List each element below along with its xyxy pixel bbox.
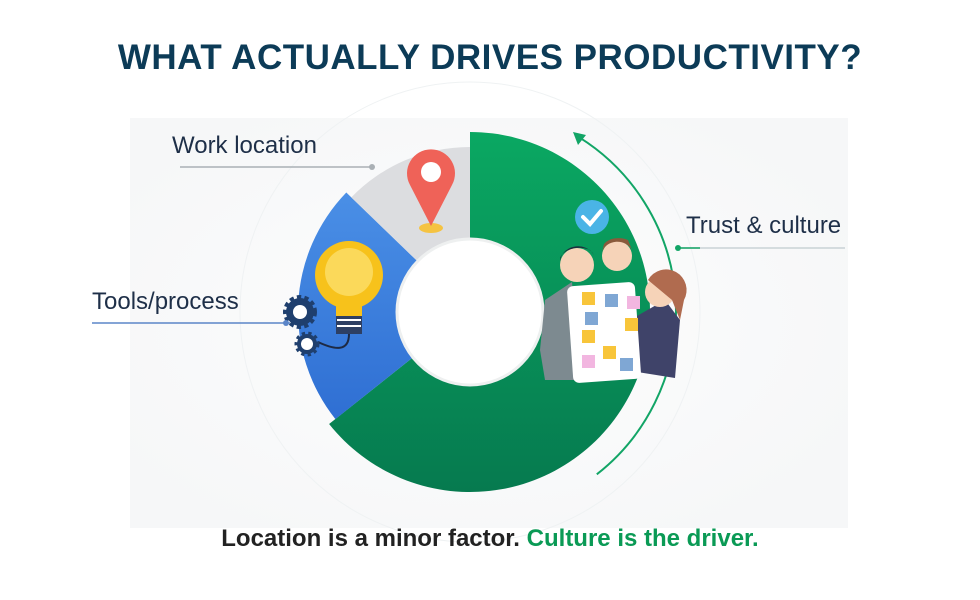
segment: tools/process: [298, 192, 418, 419]
label line: trust & culture: [675, 245, 845, 251]
illustration: team with board: [540, 238, 687, 383]
title: WHAT ACTUALLY DRIVES PRODUCTIVITY?: [118, 38, 862, 77]
arrow: growth arc: [573, 132, 676, 474]
label: trust & culture: Trust & culture: [686, 212, 841, 239]
icon: checkmark badge: [575, 200, 609, 234]
donut chart: [298, 132, 650, 492]
segment: trust & culture: [329, 132, 650, 492]
icon: location pin: [407, 149, 455, 233]
icon: light bulb and gears: [286, 241, 383, 354]
label line: work location: [180, 164, 375, 170]
bottom caption: Location is a minor factor. Culture is the driver.: [221, 525, 759, 552]
label: work location: Work location: [172, 132, 317, 159]
label: tools/process: Tools/process: [92, 288, 239, 315]
label line: tools/process: [92, 320, 290, 326]
segment: work location: [351, 147, 470, 261]
